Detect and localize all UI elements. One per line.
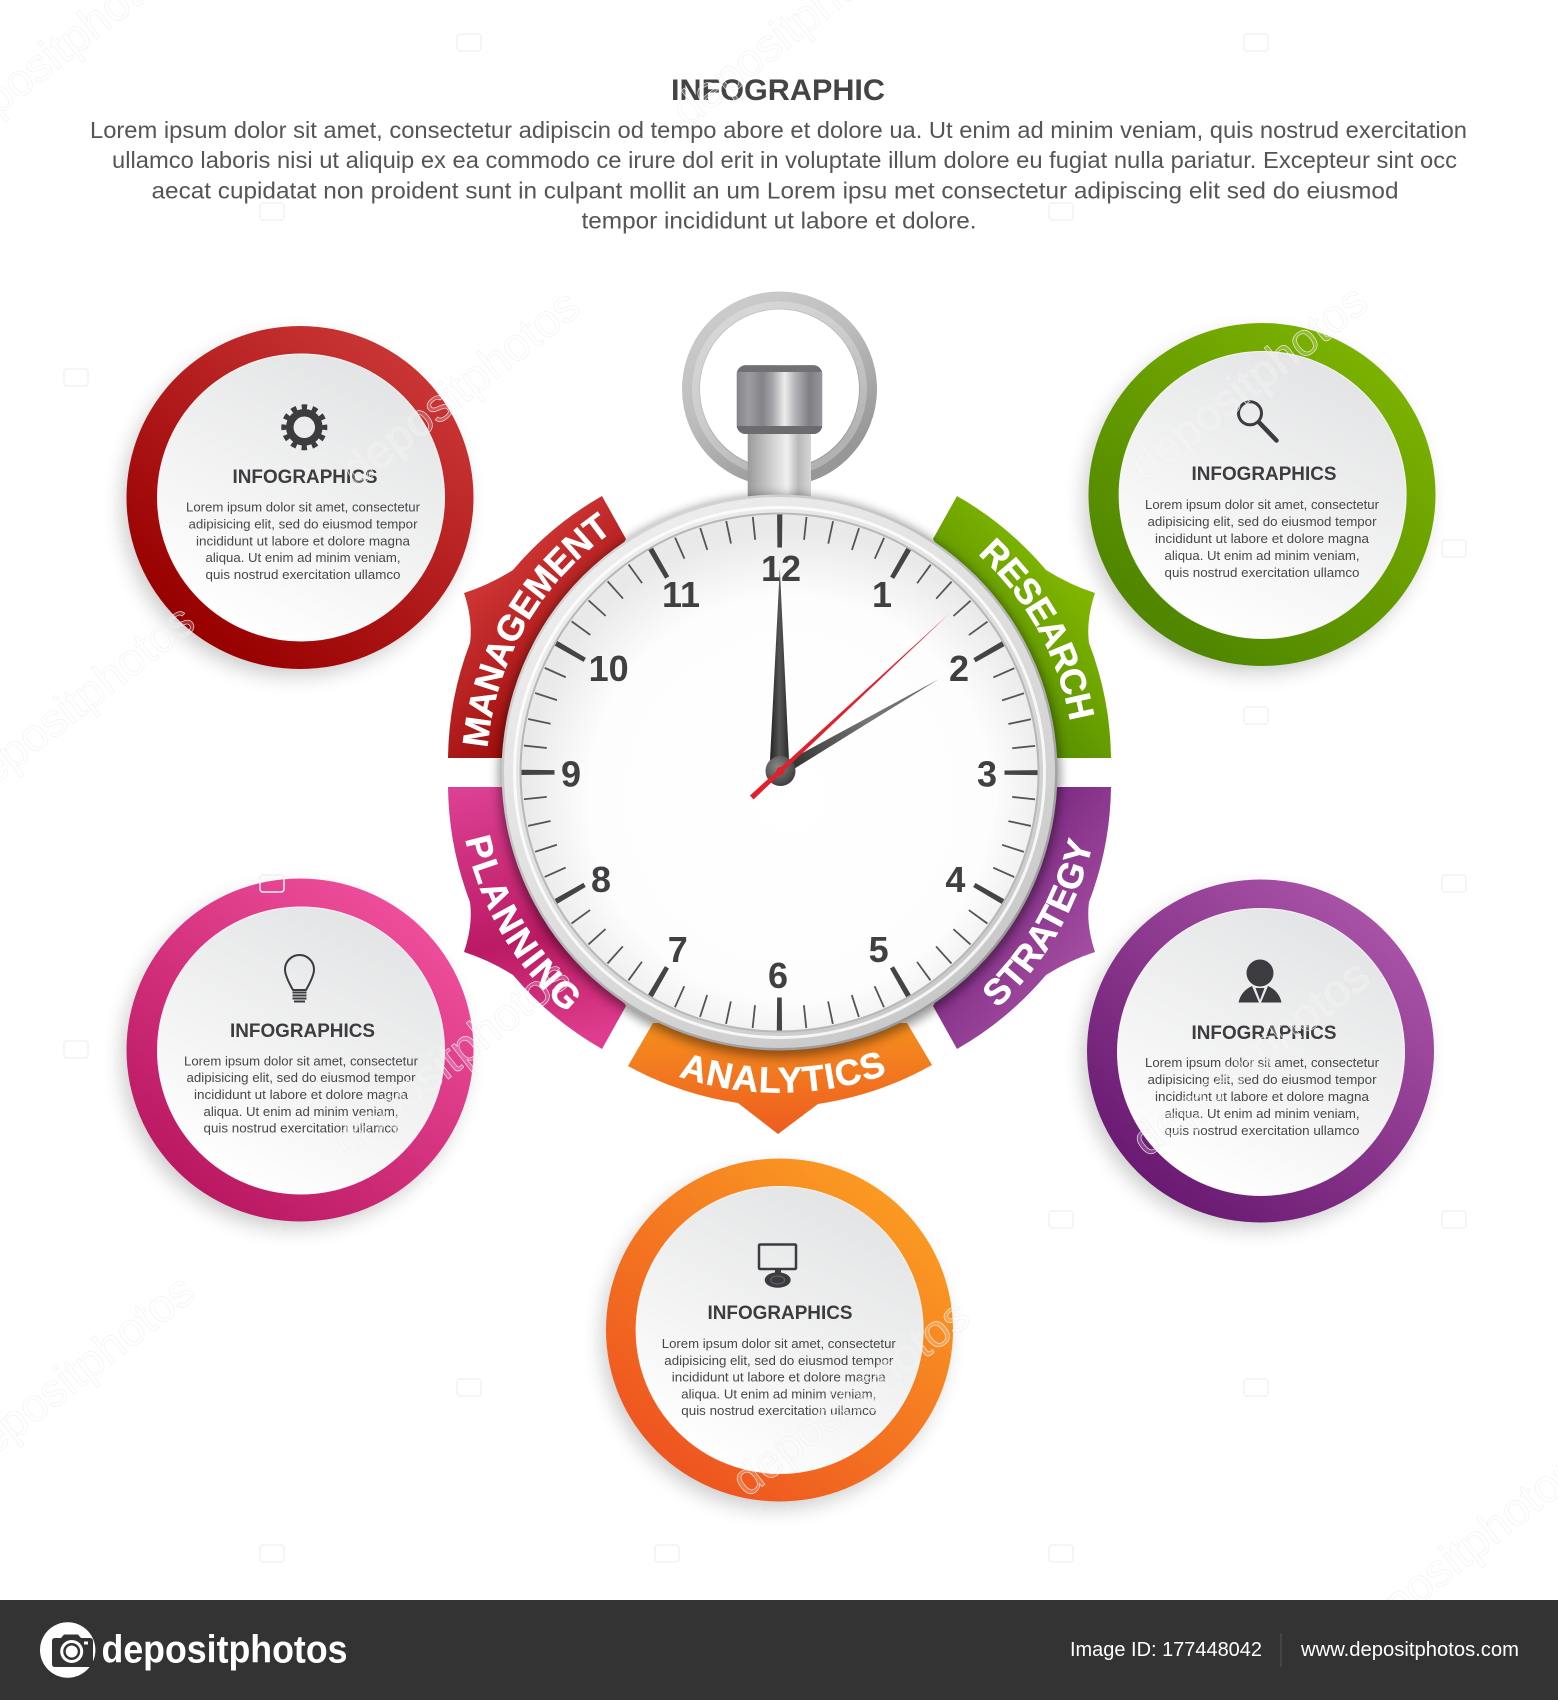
body text: Lorem ipsum dolor sit amet, consectetur [184, 1053, 419, 1068]
body text: adipisicing elit, sed do eiusmod tempor [1148, 514, 1377, 529]
body text: adipisicing elit, sed do eiusmod tempor [186, 1070, 416, 1085]
body text: incididunt ut labore et dolore magna [672, 1370, 887, 1385]
body text: aliqua. Ut enim ad minim veniam, [681, 1386, 876, 1401]
body text: aliqua. Ut enim ad minim veniam, [1164, 1106, 1360, 1121]
hour numbers: 6 [768, 955, 788, 996]
body text: quis nostrud exercitation ullamco [204, 1121, 398, 1136]
body text: Lorem ipsum dolor sit amet, consectetur [662, 1336, 896, 1351]
ribbon: research [933, 496, 1111, 758]
footer bar [0, 1600, 1558, 1700]
hour ticks [538, 531, 1021, 1014]
intro text block: ullamco laboris nisi ut aliquip ex ea commodo ce irure dol erit in voluptate illum dolore eu fugiat nulla pariatur. Excepteur sint occ [112, 147, 1457, 173]
intro text block: Lorem ipsum dolor sit amet, consectetur adipiscin od tempo abore et dolore ua. Ut enim ad minim veniam, quis nostrud exercitation [90, 117, 1467, 143]
hour numbers: 1 [872, 574, 892, 615]
hour numbers: 11 [662, 574, 700, 615]
ribbon: management: MANAGEMENT [462, 511, 606, 746]
logo wordmark: depositphotos [102, 1628, 348, 1672]
heading: INFOGRAPHICS [232, 467, 378, 488]
body text: aliqua. Ut enim ad minim veniam, [206, 550, 400, 565]
body text: quis nostrud exercitation ullamco [1164, 565, 1360, 580]
heading: INFOGRAPHICS [1192, 1023, 1336, 1044]
hour numbers: 10 [589, 648, 629, 689]
body text: adipisicing elit, sed do eiusmod tempor [1148, 1072, 1377, 1087]
body text: Lorem ipsum dolor sit amet, consectetur [1145, 497, 1380, 512]
hour numbers [561, 548, 997, 996]
icon: person [1238, 960, 1282, 1002]
stopwatch crown [737, 365, 822, 434]
ribbon: analytics: ANALYTICS [679, 1052, 884, 1093]
body text: incididunt ut labore et dolore magna [194, 1087, 409, 1102]
hour numbers: 4 [945, 859, 965, 900]
ribbon: planning: PLANNING [465, 834, 579, 1010]
hour numbers: 8 [591, 859, 611, 900]
body text: Lorem ipsum dolor sit amet, consectetur [186, 500, 421, 515]
watermarks: depositphotos [321, 949, 579, 1166]
image id: Image ID: 177448042 [1070, 1639, 1262, 1661]
stopwatch pull ring [691, 300, 868, 478]
icon: gear [284, 407, 325, 448]
body text: adipisicing elit, sed do eiusmod tempor [664, 1353, 894, 1368]
watermarks: depositphotos [721, 1289, 979, 1506]
body text [1145, 497, 1380, 580]
ribbon: planning [448, 787, 626, 1049]
heading: INFOGRAPHICS [1192, 464, 1336, 485]
watermarks: depositphotos [331, 279, 589, 496]
panel: planning circle [122, 878, 474, 1228]
body text: aliqua. Ut enim ad minim veniam, [204, 1104, 398, 1119]
stopwatch stem [748, 430, 811, 500]
body text [662, 1336, 896, 1418]
hour numbers: 5 [869, 929, 889, 970]
body text: quis nostrud exercitation ullamco [681, 1403, 876, 1418]
body text [1145, 1055, 1380, 1138]
hour numbers: 9 [561, 754, 581, 794]
heading: INFOGRAPHICS [708, 1303, 852, 1324]
body text [184, 1053, 419, 1136]
icon: light bulb [285, 955, 314, 1002]
hour numbers: 3 [977, 754, 997, 794]
ribbon: analytics [628, 1023, 932, 1134]
hour numbers: 7 [668, 929, 688, 970]
body text: quis nostrud exercitation ullamco [206, 567, 400, 582]
icon: monitor [759, 1244, 796, 1288]
logo mark [40, 1622, 95, 1678]
minute ticks [534, 527, 1025, 1018]
panel: analytics circle [602, 1158, 953, 1508]
clock hands [750, 568, 950, 800]
body text: aliqua. Ut enim ad minim veniam, [1164, 548, 1360, 563]
body text: Lorem ipsum dolor sit amet, consectetur [1145, 1055, 1380, 1070]
ribbon: strategy [933, 787, 1111, 1049]
intro text block: aecat cupidatat non proident sunt in culpant mollit an um Lorem ipsu met consectetur adipiscing elit sed do eiusmod [152, 178, 1398, 204]
watermarks: depositphotos [1119, 274, 1377, 491]
ribbon: research: RESEARCH [979, 538, 1094, 720]
stopwatch clock face [498, 494, 1060, 1057]
site url: www.depositphotos.com [1300, 1639, 1519, 1661]
title: INFOGRAPHIC [671, 74, 885, 107]
panel: research circle [1084, 323, 1436, 673]
heading: INFOGRAPHICS [230, 1021, 375, 1042]
intro text block: tempor incididunt ut labore et dolore. [582, 208, 976, 234]
panel: management circle [122, 326, 474, 676]
watermarks: depositphotos [1121, 949, 1379, 1166]
body text: incididunt ut labore et dolore magna [1155, 1089, 1370, 1104]
intro text block [90, 117, 1467, 234]
hour numbers: 12 [761, 548, 801, 589]
body text: incididunt ut labore et dolore magna [1155, 531, 1370, 546]
body text [186, 500, 421, 582]
hour numbers: 2 [949, 648, 969, 689]
body text: adipisicing elit, sed do eiusmod tempor [188, 517, 418, 532]
body text: incididunt ut labore et dolore magna [196, 533, 411, 548]
body text: quis nostrud exercitation ullamco [1164, 1123, 1360, 1138]
ribbon: strategy: STRATEGY [984, 837, 1091, 1005]
icon: magnifier [1238, 402, 1276, 440]
panel: strategy circle [1082, 880, 1434, 1230]
